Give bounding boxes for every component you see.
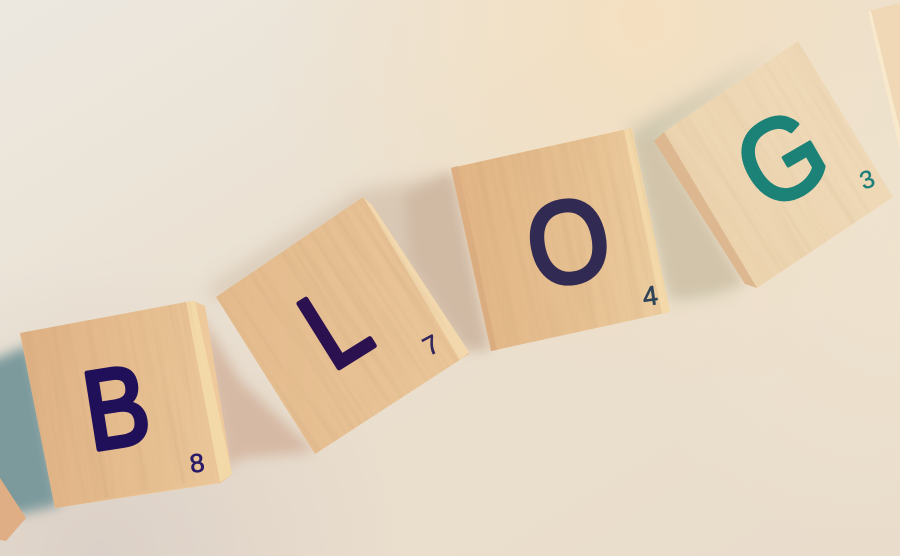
letter O: O xyxy=(516,171,621,314)
tile value 3: 3 xyxy=(856,164,879,195)
shadows cast by tiles xyxy=(0,50,780,515)
letter G: G xyxy=(714,83,849,236)
letter L: L xyxy=(280,260,390,392)
tile: B xyxy=(20,301,232,508)
letter B: B xyxy=(75,342,158,475)
tile: G xyxy=(654,41,893,288)
tile value 4: 4 xyxy=(641,280,660,312)
tile: L xyxy=(216,197,469,454)
tile: O xyxy=(451,128,670,351)
partial tile, bottom left xyxy=(0,478,26,541)
tile value 7: 7 xyxy=(418,328,444,362)
partial tile, top right xyxy=(868,3,900,152)
tile value 8: 8 xyxy=(188,447,206,479)
